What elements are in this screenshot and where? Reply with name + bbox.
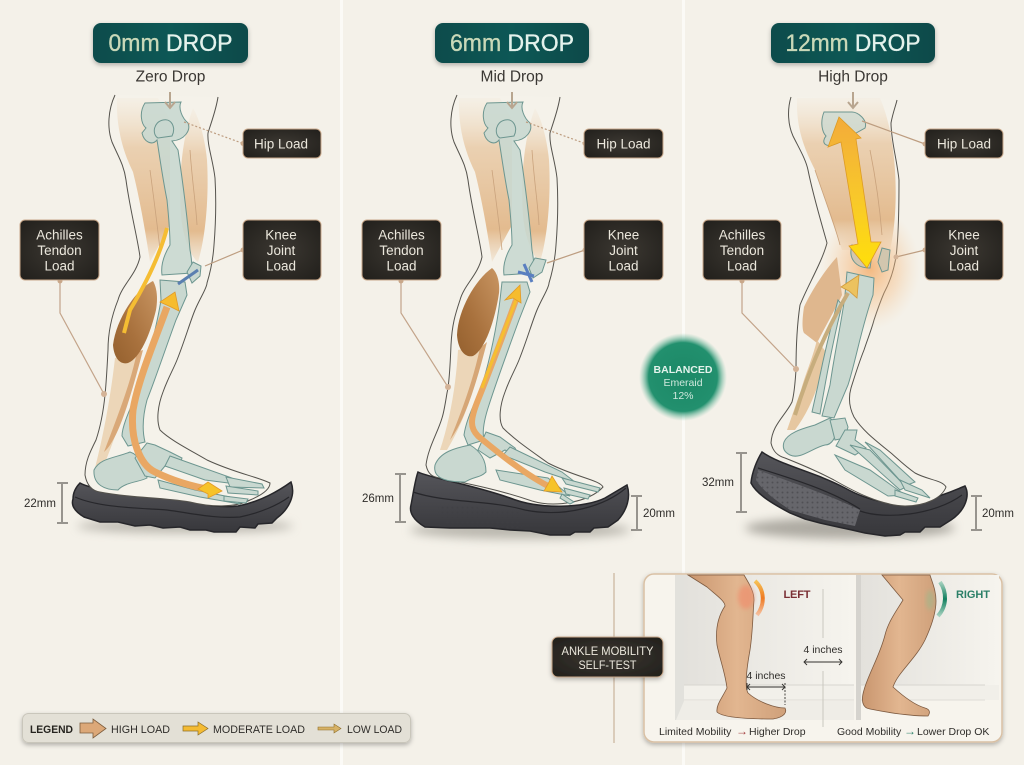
callout: achilles tendon load: Tendon (37, 243, 82, 258)
callout: achilles tendon load: Achilles (378, 228, 425, 242)
title: 0mm DROP: 0mm DROP (108, 30, 232, 57)
caption: good mobility: Lower Drop OK (917, 726, 989, 738)
badge: balanced (639, 333, 727, 421)
thigh muscles (117, 98, 208, 262)
dimension: 26mm: 26mm (362, 493, 394, 505)
wall and floor: left (675, 575, 854, 720)
callout: knee joint load (205, 220, 321, 280)
caption: limited mobility: Limited Mobility (659, 726, 732, 738)
subtitle: High Drop: High Drop (818, 68, 888, 86)
arrow: load path leg to foot (132, 292, 222, 498)
icon: high load arrow (80, 719, 106, 738)
knee glow (820, 206, 920, 330)
callout: hip load: Hip Load (596, 136, 651, 152)
badge: balanced: Emeraid (663, 377, 703, 389)
legend (22, 714, 410, 742)
force arrow: hip (165, 92, 175, 108)
arrow: high double-headed hip to knee (828, 117, 881, 268)
dimension: 20mm: 20mm (643, 508, 675, 520)
title: 0mm DROP (93, 23, 248, 63)
callout: knee joint load: Load (949, 258, 979, 274)
dimension: 20mm (631, 496, 675, 530)
callout: ankle mobility self-test (552, 637, 663, 677)
calf muscle and tendon (440, 268, 499, 450)
leg: limited mobility (688, 575, 786, 719)
subtitle: Zero Drop: Zero Drop (136, 68, 205, 86)
panel: 6mm drop (362, 23, 675, 539)
legend: high load: HIGH LOAD (111, 724, 170, 736)
callout: achilles tendon load: Load (386, 258, 417, 274)
callout: achilles tendon load: Tendon (379, 243, 424, 258)
callout: achilles tendon load: Tendon (720, 243, 764, 258)
bones (783, 112, 930, 502)
caption: good mobility: → (904, 724, 916, 738)
callout: hip load (184, 122, 321, 158)
callout: knee joint load: Joint (609, 243, 638, 258)
shoe sole (745, 452, 967, 539)
shoe sole (410, 472, 630, 539)
callout: knee joint load: Joint (267, 243, 295, 258)
arrow: low load up shin (795, 275, 859, 415)
callout: achilles tendon load: Load (44, 258, 75, 274)
title: 12mm DROP (771, 23, 935, 63)
label: RIGHT: RIGHT (956, 589, 990, 601)
callout: knee joint load: Load (266, 258, 296, 274)
callout: knee joint load: Knee (265, 228, 297, 242)
panel: 12mm drop (702, 23, 1014, 539)
arrow: load path leg to foot (472, 285, 562, 492)
thigh and calf muscles (787, 98, 896, 430)
panel background (644, 574, 1002, 742)
shoe sole (72, 482, 293, 533)
callout: hip load: Hip Load (254, 136, 308, 152)
badge: balanced: 12% (672, 390, 694, 402)
dimension: 32mm: 32mm (702, 477, 734, 489)
legend: moderate load: MODERATE LOAD (213, 724, 305, 736)
callout: achilles tendon load: Achilles (36, 228, 83, 242)
caption: limited mobility (659, 724, 806, 738)
dimension: 22mm: 22mm (24, 498, 56, 510)
callout: achilles tendon load (362, 220, 451, 390)
callout: knee joint load: Knee (948, 228, 980, 242)
callout: knee joint load: Joint (950, 243, 978, 258)
dimension: 22mm (24, 483, 68, 523)
divider: ankle test (614, 573, 615, 743)
knee arc: left (755, 581, 763, 615)
center separator (822, 589, 824, 727)
title: 6mm DROP (435, 23, 589, 63)
knee arc: right (938, 582, 945, 616)
measure: 4 inches center (803, 644, 843, 665)
icon: low load arrow (318, 724, 341, 733)
callout: achilles tendon load (20, 220, 107, 397)
dimension: 20mm: 20mm (982, 508, 1014, 520)
panel: ankle mobility self-test (644, 574, 1002, 742)
dimension: 26mm (362, 474, 406, 522)
knee ligament (178, 270, 198, 284)
arrow: low load from calf (124, 228, 167, 333)
title: 12mm DROP: 12mm DROP (786, 30, 920, 57)
label: LEFT: LEFT (784, 589, 811, 601)
leg outline (85, 95, 270, 506)
leg outline (426, 95, 603, 504)
calf muscle and tendon (95, 281, 157, 468)
callout: hip load (862, 121, 1003, 158)
force arrow: hip (507, 92, 517, 108)
panel: 0mm drop (20, 23, 321, 533)
badge: balanced: BALANCED (654, 364, 713, 376)
bones (94, 102, 264, 504)
measure: 4 inches center: 4 inches (803, 644, 843, 656)
caption: limited mobility: → (736, 724, 748, 738)
wall and floor: right (856, 575, 999, 720)
callout: knee joint load: Load (608, 258, 639, 274)
dimension: 20mm (971, 496, 1014, 530)
legend title: LEGEND (30, 724, 73, 736)
knee ligament (518, 264, 534, 282)
callout: ankle mobility self-test: SELF-TEST (578, 660, 636, 672)
caption: good mobility (837, 724, 989, 738)
measure: 4 inches left: 4 inches (746, 670, 786, 682)
callout: knee joint load (894, 220, 1003, 280)
leg: good mobility (862, 575, 936, 716)
leg outline (771, 97, 946, 506)
callout: hip load (526, 122, 663, 158)
title: 6mm DROP: 6mm DROP (450, 30, 574, 57)
callout: knee joint load (547, 220, 663, 280)
callout: hip load: Hip Load (937, 136, 991, 152)
callout: knee joint load: Knee (608, 228, 639, 242)
caption: limited mobility: Higher Drop (749, 726, 806, 738)
icon: moderate load arrow (183, 722, 208, 735)
force arrow: hip (848, 92, 858, 108)
caption: good mobility: Good Mobility (837, 726, 902, 738)
callout: achilles tendon load: Achilles (719, 228, 766, 242)
callout: achilles tendon load: Load (727, 258, 757, 274)
bones (435, 102, 600, 504)
dimension: 32mm (702, 453, 747, 512)
thigh muscles (459, 98, 550, 262)
legend: low load: LOW LOAD (347, 724, 402, 736)
callout: ankle mobility self-test: ANKLE MOBILITY (562, 646, 654, 658)
callout: achilles tendon load (703, 220, 799, 372)
subtitle: Mid Drop: Mid Drop (481, 68, 543, 86)
measure: 4 inches left (746, 670, 786, 705)
